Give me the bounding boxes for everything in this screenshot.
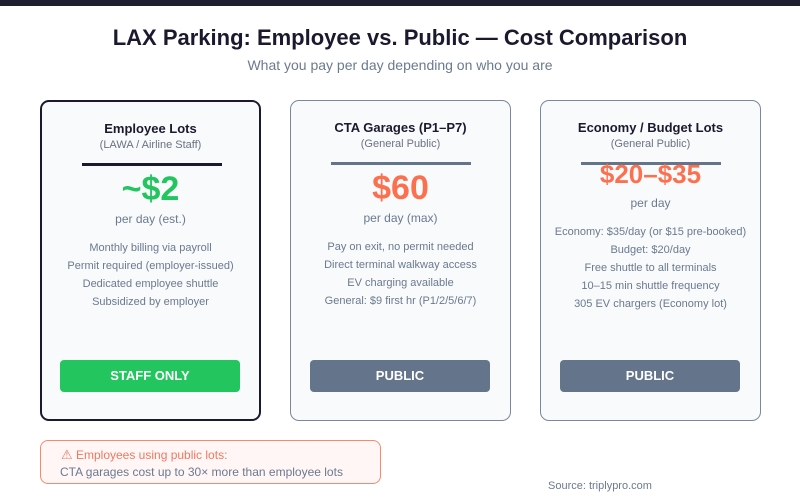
button: public: PUBLIC (376, 368, 424, 383)
title: LAX Parking: Employee vs. Public — Cost Comparison (113, 25, 687, 50)
callout (40, 440, 381, 484)
button: public (560, 360, 740, 392)
heading: Employee Lots (104, 121, 197, 136)
features: Direct terminal walkway access (324, 259, 477, 271)
features: Permit required (employer-issued) (67, 260, 234, 272)
price unit: per day (est.) (115, 212, 186, 226)
features: Pay on exit, no permit needed (327, 241, 474, 253)
top bar (0, 0, 800, 6)
callout text: CTA garages cost up to 30× more than employee lots (60, 465, 343, 479)
button: staff only (60, 360, 240, 392)
features: EV charging available (347, 277, 454, 289)
panel: CTA garages (290, 100, 511, 421)
price unit: per day (630, 196, 671, 210)
heading: CTA Garages (P1–P7) (334, 120, 467, 135)
features: 10–15 min shuttle frequency (581, 280, 720, 292)
callout heading: ⚠ Employees using public lots: (61, 447, 227, 462)
button: staff only: STAFF ONLY (110, 368, 190, 383)
features: General: $9 first hr (P1/2/5/6/7) (325, 295, 476, 307)
features: 305 EV chargers (Economy lot) (574, 298, 727, 310)
subtitle: What you pay per day depending on who you are (247, 57, 553, 73)
price: $60 (372, 169, 429, 207)
button: public: PUBLIC (626, 368, 674, 383)
price unit: per day (max) (363, 211, 438, 225)
price: $20–$35 (600, 159, 701, 189)
panel: economy lots (540, 100, 761, 421)
subheading: (General Public) (361, 138, 440, 150)
features: Free shuttle to all terminals (584, 262, 717, 274)
features: Budget: $20/day (610, 244, 691, 256)
features: Economy: $35/day (or $15 pre-booked) (555, 226, 746, 238)
price: ~$2 (122, 170, 179, 208)
panel: employee lots (40, 100, 261, 421)
subheading: (LAWA / Airline Staff) (100, 139, 201, 151)
features (324, 241, 477, 307)
features (555, 226, 746, 310)
subheading: (General Public) (611, 138, 690, 150)
features: Dedicated employee shuttle (83, 278, 218, 290)
source: Source: triplypro.com (548, 480, 652, 492)
features: Monthly billing via payroll (89, 242, 212, 254)
heading: Economy / Budget Lots (578, 120, 723, 135)
button: public (310, 360, 490, 392)
features (67, 242, 234, 308)
features: Subsidized by employer (92, 296, 209, 308)
